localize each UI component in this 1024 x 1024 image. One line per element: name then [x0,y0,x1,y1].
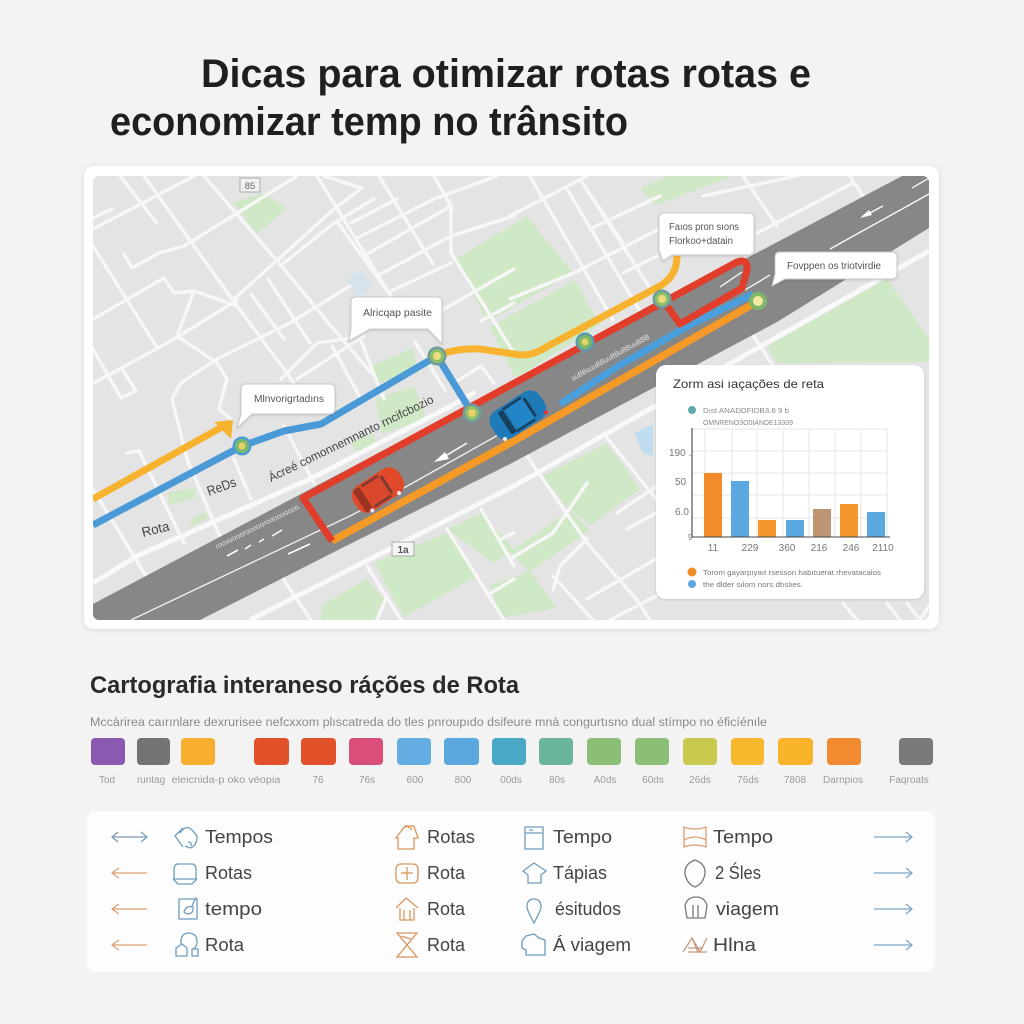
swatch labels: 600 [407,775,424,786]
column 3 labels: Á viagem [553,935,631,955]
callout: Alricqap pasite: Alricqap pasite [363,308,432,319]
road direction arrows [434,206,883,462]
chart bottom legend [688,568,881,589]
section description: Mccàrirea caırınlare dexrurisee nefcxxom plıscatreda do tles pnroupıdo dsifeure mnà congurtısno dual stímpo no éficíénıle [90,717,767,729]
callout: Alricqap pasite [349,297,442,344]
road small text [214,332,651,551]
callout: Faıos pron sıons: Florkoo+datain [669,236,733,247]
swatch labels: Tod [99,775,115,786]
map area labels [140,391,436,540]
bar chart: 2110 [872,543,894,554]
swatch labels: 80s [549,775,565,786]
swatch labels: 76 [312,775,324,786]
column 3 labels: ésitudos [555,899,621,919]
bar chart: 9 [688,533,693,542]
road small text: uuBBsuuBBuuBBuBBuuBBB [570,332,651,383]
title: economizar temp no trânsito [110,100,628,144]
callout: Faıos pron sıons [659,213,754,261]
callout: Fovppen os triotvirdie: Fovppen os triotvirdie [787,261,881,272]
swatch labels [99,775,929,786]
swatch labels: 00ds [500,775,522,786]
route: red [303,261,747,541]
panel: route map [84,166,939,629]
bar chart: 360 [779,543,796,554]
map water [347,270,653,456]
column 3 labels [553,827,631,955]
column 1 labels: Rota [205,935,245,955]
swatch labels: 800 [455,775,472,786]
swatch labels: 60ds [642,775,664,786]
route: light blue on road [560,294,753,404]
column 3 labels: Tápias [553,863,607,883]
column 1 labels: Rotas [205,863,252,883]
map area labels: Ácreé comonnemnanto rncifcbozio [266,391,436,485]
bar chart: 246 [843,543,860,554]
title [110,52,811,144]
road small text: rooxuoooroooooroooooooon [214,502,301,551]
chart title: Zorm asi ıaçações de reta [673,377,824,391]
road label box: bottom [392,542,414,556]
car: blue [490,390,548,442]
swatch labels: 26ds [689,775,711,786]
route: orange yellow lower [332,304,753,541]
map parks [167,176,929,620]
route: yellow upper [437,256,677,356]
callout: Mlnvorigrtadıns [237,384,335,428]
bar chart [669,428,894,554]
road label box: top [240,178,260,192]
panel: icon list [87,811,935,972]
swatch labels: Faqroats [889,775,929,786]
main parallel white roads [93,251,929,620]
swatch labels: Darnpios [823,775,863,786]
column 4 labels: viagem [716,899,779,919]
map area labels: Rota [140,518,171,540]
column 3 icons [522,827,546,955]
highway [93,176,929,620]
column 2 labels: Rota [427,935,466,955]
bar chart: 11 [708,543,719,554]
chart bottom legend: Torom gayarpıyaıt rsesson habıtuerat rhevatacalos [703,568,881,577]
bar chart: 50 [675,477,687,488]
bar chart: 216 [811,543,828,554]
panel: chart [656,365,924,599]
route: left yellow [93,420,233,499]
column 2 labels: Rotas [427,827,475,847]
column 1 labels [205,827,273,955]
column 4 icons [683,827,707,952]
column 4 labels: Tempo [713,827,773,847]
map area labels: ReDs [205,474,238,499]
column 2 labels: Rota [427,863,466,883]
swatch labels: 76s [359,775,375,786]
title: Dicas para otimizar rotas rotas e [201,52,811,96]
road label box: top: 85 [245,181,255,192]
callout: Mlnvorigrtadıns: Mlnvorigrtadıns [254,394,324,405]
column 4 labels: 2 Śles [715,862,761,883]
chart top legend [688,406,793,427]
swatch labels: eleicnida-p oko vèopia [172,775,281,786]
road label box: bottom: 1a [397,545,409,556]
column 4 labels: Hlna [713,935,757,955]
left arrows [112,832,147,950]
chart top legend: Dıst ANADDFIDB3.6 9 b [703,406,789,415]
route markers [232,290,767,456]
section heading: Cartografia interaneso ráções de Rota [90,672,520,699]
callout: Fovppen os triotvirdie [772,252,897,286]
street grid [93,176,929,620]
callout: Faıos pron sıons: Faıos pron sıons [669,222,739,233]
bar chart: 6.0 [675,507,689,518]
swatch labels: runtag [137,775,165,786]
column 1 icons [173,828,198,956]
column 1 labels: Tempos [205,827,273,847]
right arrows [874,832,912,950]
column 4 labels [713,827,779,955]
chart bottom legend: the dlder sılom nors dtıslıes. [703,580,803,589]
chart top legend: OMNRENO3O0IANDE13309 [703,418,793,427]
swatch labels: 7808 [784,775,807,786]
swatch labels: A0ds [594,775,616,786]
column 3 labels: Tempo [553,827,612,847]
column 1 labels: tempo [205,899,262,919]
route: blue [93,356,472,525]
column 2 labels: Rota [427,899,466,919]
column 2 icons [396,826,418,957]
colour legend swatches [91,738,933,765]
bar chart: 190 . [669,448,691,459]
swatch labels: 76ds [737,775,759,786]
column 2 labels [427,827,475,955]
car: red [352,467,404,513]
bar chart: 229 [742,543,759,554]
